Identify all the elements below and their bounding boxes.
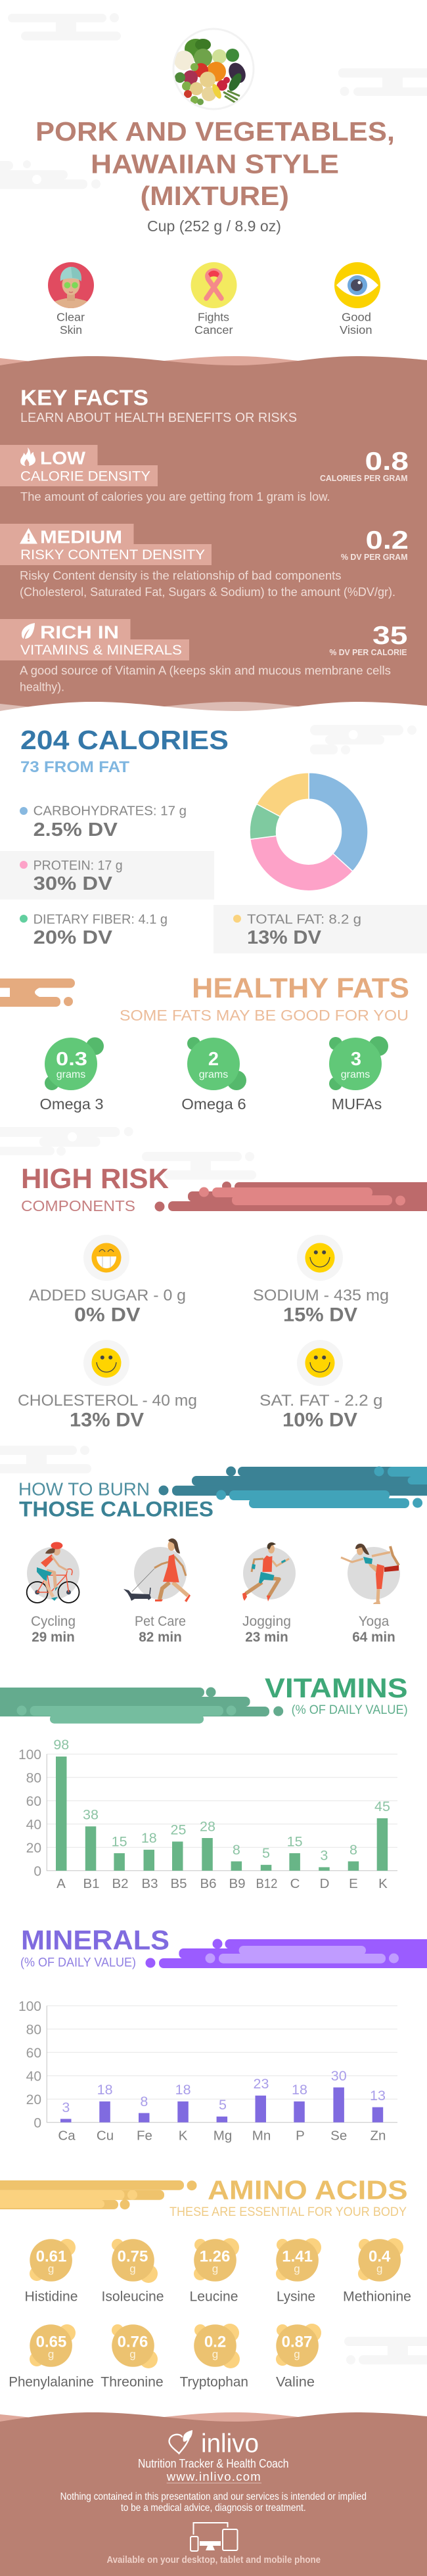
fact: low calorie density: CALORIE DENSITY (20, 468, 150, 484)
amino: phenylalanine: Phenylalanine (9, 2375, 94, 2390)
fact: low calorie density: CALORIES PER GRAM (320, 473, 407, 483)
risk: cholesterol: CHOLESTEROL - 40 mg (18, 1392, 197, 1410)
fact: medium risky content density: MEDIUM (40, 527, 122, 547)
amino: valine: Valine (276, 2375, 315, 2390)
activity label: pet care: 82 min (139, 1630, 182, 1645)
bar chart: vitamins: D (320, 1876, 329, 1891)
amino: tryptophan (180, 2324, 248, 2390)
bar chart: minerals: Zn (371, 2128, 386, 2144)
legend: dietary fiber (20, 911, 168, 948)
heading: healthy fats: HEALTHY FATS (192, 973, 409, 1004)
bar chart: minerals: 13 (370, 2088, 386, 2104)
amino: histidine: Histidine (25, 2289, 78, 2305)
amino: valine (276, 2324, 321, 2390)
amino: lysine: Lysine (277, 2289, 315, 2305)
icon: warning triangle (20, 528, 37, 544)
panel: key facts (0, 356, 427, 720)
bar chart: minerals: 18 (292, 2082, 307, 2098)
stat: mufas (329, 1036, 388, 1113)
logo: inlivo: inlivo (201, 2429, 259, 2458)
risk: sodium: SODIUM - 435 mg (253, 1287, 389, 1304)
panel: footer: Available on your desktop, tablet and mobile phone (106, 2554, 321, 2565)
amino: leucine (189, 2238, 239, 2305)
heading: key facts (20, 385, 297, 425)
heading: high risk (21, 1163, 169, 1214)
heading: minerals (20, 1925, 169, 1970)
icon: flame (20, 448, 35, 466)
benefit: good vision: Vision (340, 323, 372, 336)
fact: rich in vitamins and minerals: healthy). (20, 681, 64, 694)
fact: medium risky content density: % DV PER GRAM (341, 552, 407, 562)
title (35, 116, 395, 211)
activity label: pet care: Pet Care (135, 1613, 186, 1629)
title: (MIXTURE) (141, 181, 289, 211)
risk: added sugar: 0% DV (74, 1304, 141, 1326)
bar chart: vitamins: B5 (170, 1876, 187, 1891)
heading: vitamins (265, 1672, 408, 1717)
bar chart: minerals: 5 (219, 2097, 227, 2113)
activity: pet care (124, 1538, 191, 1602)
bar chart: vitamins: 15 (112, 1833, 127, 1849)
activity label: jogging (242, 1613, 291, 1645)
legend: dietary fiber: DIETARY FIBER: 4.1 g (34, 911, 168, 927)
amino: threonine (101, 2324, 164, 2390)
fact: medium risky content density: Risky Content density is the relationship of bad components (20, 569, 342, 582)
benefit: clear skin: Skin (60, 323, 82, 336)
donut chart: macronutrients (250, 773, 368, 891)
background cloud shapes: amino (344, 2337, 427, 2364)
legend: total fat: TOTAL FAT: 8.2 g (247, 911, 361, 927)
activity: jogging (242, 1542, 296, 1601)
section decoration: amino acids (0, 2180, 197, 2209)
heading: healthy fats: SOME FATS MAY BE GOOD FOR YOU (120, 1007, 409, 1024)
bar chart: minerals: 0 (34, 2116, 41, 2130)
bar chart: minerals: 80 (26, 2023, 41, 2037)
bar chart: vitamins: 40 (26, 1818, 41, 1832)
bar chart: minerals: Se (330, 2128, 347, 2144)
amino: phenylalanine: g (48, 2348, 54, 2360)
benefit: clear skin: Clear (56, 310, 85, 323)
heading: how to burn: THOSE CALORIES (19, 1498, 214, 1521)
legend: protein (0, 851, 214, 900)
bar chart: minerals: Mn (252, 2128, 271, 2144)
risk: cholesterol (18, 1340, 197, 1431)
stat: omega 3 (39, 1037, 104, 1113)
heading: amino acids: THESE ARE ESSENTIAL FOR YOUR BODY (169, 2205, 407, 2219)
bar chart: vitamins: 5 (262, 1845, 270, 1861)
amino: methionine (343, 2238, 411, 2305)
risk: sodium: 15% DV (283, 1304, 357, 1326)
amino: phenylalanine: 0.65 (36, 2334, 66, 2351)
legend: total fat: 13% DV (247, 927, 321, 948)
risk: saturated fat (259, 1340, 382, 1431)
amino: threonine: Threonine (101, 2375, 164, 2390)
amino: leucine: 1.26 (200, 2248, 230, 2266)
benefit: fights cancer (191, 262, 236, 336)
amino: valine: g (294, 2348, 300, 2360)
heading: amino acids: AMINO ACIDS (208, 2175, 408, 2205)
amino: methionine: Methionine (343, 2289, 411, 2305)
fact: medium risky content density: 0.2 (365, 526, 409, 555)
heading: vitamins: VITAMINS (265, 1672, 408, 1703)
bar chart: vitamins (18, 1737, 397, 1891)
heading: how to burn (18, 1479, 214, 1521)
bar chart: minerals: Ca (58, 2128, 76, 2144)
bar chart: minerals: P (296, 2128, 305, 2144)
risk: cholesterol: 13% DV (70, 1410, 144, 1431)
bar chart: minerals: 30 (331, 2068, 347, 2084)
benefit: clear skin (47, 262, 95, 336)
bar chart: vitamins: C (290, 1876, 300, 1891)
risk: added sugar: ADDED SUGAR - 0 g (29, 1287, 186, 1304)
bar chart: minerals: K (179, 2128, 188, 2144)
fact: rich in vitamins and minerals: RICH IN (40, 622, 119, 643)
activity label: jogging: Jogging (242, 1613, 291, 1629)
bar chart: minerals: 8 (140, 2094, 148, 2109)
amino: tryptophan: g (212, 2348, 218, 2360)
activity label: pet care (135, 1613, 186, 1645)
bar chart: vitamins: B6 (200, 1876, 217, 1891)
bar chart: vitamins: 45 (374, 1799, 390, 1814)
amino: isoleucine: 0.75 (118, 2248, 148, 2266)
amino: histidine: 0.61 (36, 2248, 66, 2266)
bar chart: vitamins: 25 (171, 1822, 186, 1837)
risk: saturated fat: 10% DV (282, 1410, 357, 1431)
amino: threonine: 0.76 (118, 2334, 148, 2351)
legend: dietary fiber: 20% DV (34, 927, 112, 948)
panel: footer: to be a medical advice, diagnosis or treatment. (121, 2502, 306, 2514)
amino: lysine: g (294, 2263, 300, 2275)
legend: carbohydrates: 2.5% DV (34, 819, 118, 840)
bar chart: minerals (18, 1999, 397, 2144)
bar chart: vitamins: B9 (229, 1876, 246, 1891)
food photo: vegetables (173, 29, 254, 109)
bar chart: vitamins: 3 (320, 1848, 328, 1864)
bar chart: vitamins: B2 (112, 1876, 129, 1891)
fact: rich in vitamins and minerals (0, 619, 407, 694)
bar chart: vitamins: 80 (26, 1770, 41, 1786)
panel: footer: Nutrition Tracker & Health Coach (138, 2456, 289, 2470)
stat: mufas: 3 (351, 1049, 361, 1070)
fact: rich in vitamins and minerals: 35 (372, 622, 407, 650)
bar chart: vitamins: E (349, 1876, 358, 1891)
activity: yoga (341, 1544, 400, 1604)
background cloud shapes: calories (310, 725, 416, 754)
bar chart: vitamins: 15 (287, 1833, 303, 1849)
bar chart: minerals: 23 (254, 2076, 269, 2092)
title: PORK AND VEGETABLES, (35, 116, 395, 147)
bar chart: minerals: Fe (137, 2128, 152, 2144)
heading: calories: 73 FROM FAT (20, 758, 129, 776)
amino: lysine (276, 2238, 321, 2305)
benefit: fights cancer: Fights (198, 310, 229, 323)
background cloud shapes: burn (0, 1446, 91, 1473)
benefit: fights cancer: Cancer (194, 323, 233, 336)
bar chart: minerals: 20 (26, 2092, 41, 2107)
risk: sodium (253, 1235, 389, 1326)
activity label: jogging: 23 min (245, 1630, 288, 1645)
heading: calories: 204 CALORIES (20, 725, 229, 755)
amino: isoleucine (101, 2239, 164, 2305)
benefit: good vision (334, 262, 380, 336)
bar chart: vitamins: 0 (34, 1864, 41, 1879)
bar chart: vitamins: 28 (200, 1819, 215, 1835)
amino: lysine: 1.41 (282, 2248, 313, 2266)
risk: saturated fat: SAT. FAT - 2.2 g (259, 1392, 382, 1410)
heading: amino acids (169, 2175, 408, 2219)
legend: protein: PROTEIN: 17 g (34, 858, 123, 873)
fact: rich in vitamins and minerals: A good source of Vitamin A (keeps skin and mucous membrane cells (20, 664, 391, 677)
section decoration: healthy fats (0, 978, 75, 1007)
stat: omega 6: 2 (208, 1049, 219, 1070)
panel: footer: Nothing contained in this presentation and our services is intended or implied (60, 2491, 367, 2502)
bar chart: vitamins: B3 (141, 1876, 158, 1891)
heading: calories (20, 725, 229, 776)
icon: leaf (22, 623, 35, 639)
fact: low calorie density: The amount of calories you are getting from 1 gram is low. (20, 490, 330, 503)
heading: how to burn: HOW TO BURN (18, 1479, 150, 1500)
risk: added sugar (29, 1235, 186, 1326)
bar chart: vitamins: 38 (83, 1807, 99, 1823)
fact: rich in vitamins and minerals: % DV PER CALORIE (330, 647, 407, 657)
title: HAWAIIAN STYLE (91, 149, 339, 179)
amino: phenylalanine (9, 2324, 94, 2390)
fact: medium risky content density (0, 524, 409, 599)
stat: omega 6: Omega 6 (181, 1095, 246, 1113)
fact: rich in vitamins and minerals: VITAMINS & MINERALS (20, 642, 182, 658)
heading: minerals: (% OF DAILY VALUE) (20, 1956, 136, 1970)
amino: methionine: g (376, 2263, 382, 2275)
heading: minerals: MINERALS (21, 1925, 169, 1956)
activity: cycling (27, 1542, 79, 1603)
bar chart: minerals: 18 (175, 2082, 191, 2098)
amino: tryptophan: Tryptophan (180, 2375, 248, 2390)
bar chart: vitamins: 100 (18, 1747, 41, 1762)
legend: carbohydrates (20, 804, 187, 840)
stat: mufas: grams (341, 1069, 370, 1080)
bar chart: minerals: 18 (97, 2082, 113, 2098)
bar chart: vitamins: B12 (256, 1876, 277, 1891)
bar chart: minerals: 40 (26, 2069, 41, 2084)
bar chart: vitamins: 60 (26, 1794, 41, 1809)
stat: omega 6: grams (199, 1069, 228, 1080)
activity label: cycling (31, 1613, 76, 1645)
amino: histidine (25, 2239, 78, 2305)
amino: histidine: g (48, 2263, 54, 2275)
amino: threonine: g (129, 2348, 136, 2360)
stat: omega 6 (181, 1037, 246, 1113)
bar chart: minerals: Mg (214, 2128, 232, 2144)
section decoration: burn (159, 1467, 427, 1508)
bar chart: vitamins: K (378, 1876, 388, 1891)
section decoration: high risk (155, 1182, 427, 1212)
amino: isoleucine: Isoleucine (101, 2289, 164, 2305)
amino: isoleucine: g (129, 2263, 136, 2275)
fact: low calorie density (0, 445, 409, 503)
amino: tryptophan: 0.2 (204, 2334, 226, 2351)
background cloud shapes: high risk (0, 1127, 256, 1180)
stat: omega 3: Omega 3 (39, 1095, 104, 1113)
legend: carbohydrates: CARBOHYDRATES: 17 g (34, 804, 187, 819)
bar chart: minerals: 3 (62, 2100, 70, 2115)
amino: leucine: g (212, 2263, 218, 2275)
heading: high risk: HIGH RISK (21, 1163, 169, 1195)
stat: mufas: MUFAs (332, 1095, 382, 1113)
panel: footer: www.inlivo.com (166, 2470, 261, 2483)
section decoration: minerals (146, 1939, 427, 1968)
benefit: good vision: Good (342, 310, 371, 323)
amino: methionine: 0.4 (369, 2248, 391, 2266)
heading: healthy fats (120, 973, 409, 1024)
legend: total fat (214, 905, 427, 954)
bar chart: vitamins: B1 (83, 1876, 100, 1891)
serving size: Cup (252 g / 8.9 oz) (147, 218, 281, 235)
amino: leucine: Leucine (189, 2289, 238, 2305)
bar chart: vitamins: 8 (233, 1842, 240, 1858)
bar chart: minerals: Cu (97, 2128, 114, 2144)
icon: devices (191, 2523, 238, 2551)
heading: high risk: COMPONENTS (21, 1197, 135, 1214)
activity label: yoga: Yoga (359, 1613, 389, 1629)
stat: omega 3: 0.3 (56, 1049, 87, 1070)
heading: vitamins: (% OF DAILY VALUE) (292, 1703, 408, 1717)
section decoration: vitamins (0, 1688, 283, 1724)
amino: valine: 0.87 (282, 2334, 312, 2351)
fact: low calorie density: 0.8 (365, 448, 409, 476)
bar chart: vitamins: 20 (26, 1841, 41, 1856)
activity label: yoga: 64 min (352, 1630, 395, 1645)
logo: inlivo (169, 2429, 259, 2458)
bar chart: vitamins: 18 (141, 1830, 157, 1846)
bar chart: vitamins: 98 (53, 1737, 69, 1753)
fact: medium risky content density: (Cholesterol, Saturated Fat, Sugars & Sodium) to the amount (%DV/gr). (20, 586, 395, 599)
heading: key facts: LEARN ABOUT HEALTH BENEFITS OR RISKS (20, 411, 297, 425)
activity label: cycling: 29 min (32, 1630, 75, 1645)
legend: protein: 30% DV (34, 873, 112, 894)
fact: medium risky content density: RISKY CONTENT DENSITY (20, 547, 205, 563)
bar chart: minerals: 100 (18, 1999, 41, 2014)
stat: omega 3: grams (56, 1069, 85, 1080)
panel: footer (0, 2412, 427, 2576)
bar chart: vitamins: A (56, 1876, 66, 1891)
background cloud shapes: header (0, 13, 427, 189)
bar chart: minerals: 60 (26, 2046, 41, 2061)
activity label: yoga (352, 1613, 395, 1645)
fact: low calorie density: LOW (40, 448, 86, 468)
activity label: cycling: Cycling (31, 1613, 76, 1629)
heading: key facts: KEY FACTS (20, 385, 148, 410)
bar chart: vitamins: 8 (349, 1842, 357, 1858)
